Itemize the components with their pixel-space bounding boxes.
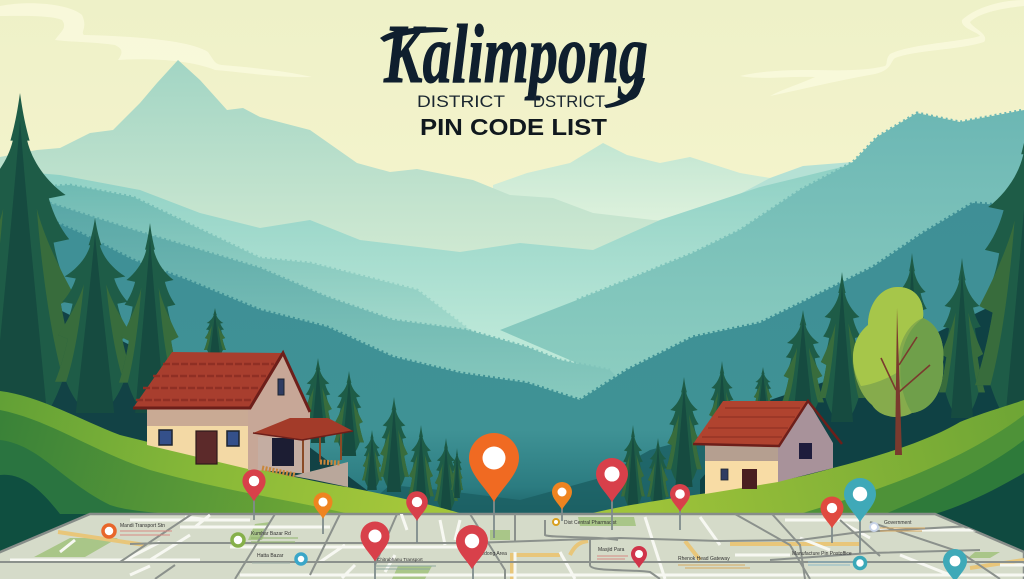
- map labels: [120, 520, 912, 562]
- far right mountain: [493, 143, 860, 300]
- map parks: [34, 517, 1000, 579]
- dark forest floor right: [700, 290, 1024, 520]
- pin: teal 955: [943, 549, 967, 579]
- pin: large orange: [469, 433, 519, 502]
- pine trees right: [621, 108, 1024, 510]
- clouds: [0, 0, 1024, 96]
- pin: red 375: [360, 522, 390, 562]
- pin: red 254: [242, 469, 266, 501]
- house left porch: [253, 418, 353, 487]
- map labels: Hatta Bazar: [257, 553, 284, 559]
- map labels: Mandi Transport Stn: [120, 523, 165, 529]
- right main ridge: [500, 110, 1024, 420]
- dark forest floor left: [0, 270, 400, 520]
- map panel: [0, 510, 1024, 579]
- map labels: Dist Central Pharmacist: [564, 520, 617, 526]
- map yellow roads: [58, 532, 1024, 579]
- pin: red 680: [670, 484, 690, 512]
- subtitle: pin code list: PIN CODE LIST: [420, 114, 607, 140]
- map labels: Chitrabhanu Transport: [377, 557, 423, 562]
- right green hill: [589, 400, 1024, 553]
- light teal ridge: [0, 165, 900, 380]
- mid right ridge: [447, 170, 900, 380]
- deciduous tree: [853, 287, 943, 455]
- pine trees left: [0, 93, 226, 433]
- right ridge tree line: [577, 110, 1024, 300]
- pale ridge right: [650, 162, 870, 300]
- house left walls: [147, 353, 310, 472]
- pin: red 639: [631, 546, 647, 568]
- house left windows and door: [159, 379, 284, 464]
- house left: [133, 352, 353, 487]
- map labels: Pedong Area: [478, 551, 507, 557]
- map labels: Manufacture Pin Postoffice: [792, 551, 852, 557]
- pin: red 612: [596, 458, 628, 502]
- left green hill: [0, 391, 463, 553]
- map label underlines: [120, 528, 925, 569]
- pin: orange 323: [314, 492, 332, 519]
- subtitle: dstrict: DSTRICT: [533, 93, 605, 111]
- left ridge one: [0, 170, 520, 400]
- left ridge two: [0, 190, 640, 420]
- pin: red 472: [456, 525, 488, 569]
- house right roof: [693, 401, 842, 446]
- subtitle: district: DISTRICT: [417, 93, 505, 111]
- map labels: Rhenok Head Gateway: [678, 556, 730, 562]
- title swash: [380, 27, 645, 108]
- pin: teal 860: [844, 478, 876, 522]
- map ring markers: [103, 519, 878, 568]
- house left roof: [133, 352, 310, 412]
- map grey roads: [0, 514, 1024, 579]
- pine trees centre: [303, 358, 463, 513]
- pin: red 417: [406, 491, 428, 521]
- title: [380, 8, 648, 140]
- map labels: Government: [884, 520, 912, 526]
- left ridge two tree line: [40, 200, 610, 370]
- house right: [693, 401, 842, 494]
- map white streets: [10, 510, 1024, 579]
- dark foreground ridge: [0, 200, 1024, 520]
- title script: Kalimpong: Kalimpong: [383, 8, 648, 101]
- dark ridge tree line: [43, 203, 1024, 400]
- pin: red 832: [820, 496, 844, 528]
- pin: orange 562: [552, 482, 572, 510]
- map labels: Masjid Para: [598, 547, 625, 553]
- location pins: [242, 433, 967, 579]
- left ridge one tree line: [40, 185, 467, 328]
- dark forest floor middle: [350, 300, 1024, 520]
- map labels: Kumhar Bazar Rd: [251, 531, 291, 537]
- large left mountain: [0, 60, 720, 320]
- pin stems: [254, 495, 860, 579]
